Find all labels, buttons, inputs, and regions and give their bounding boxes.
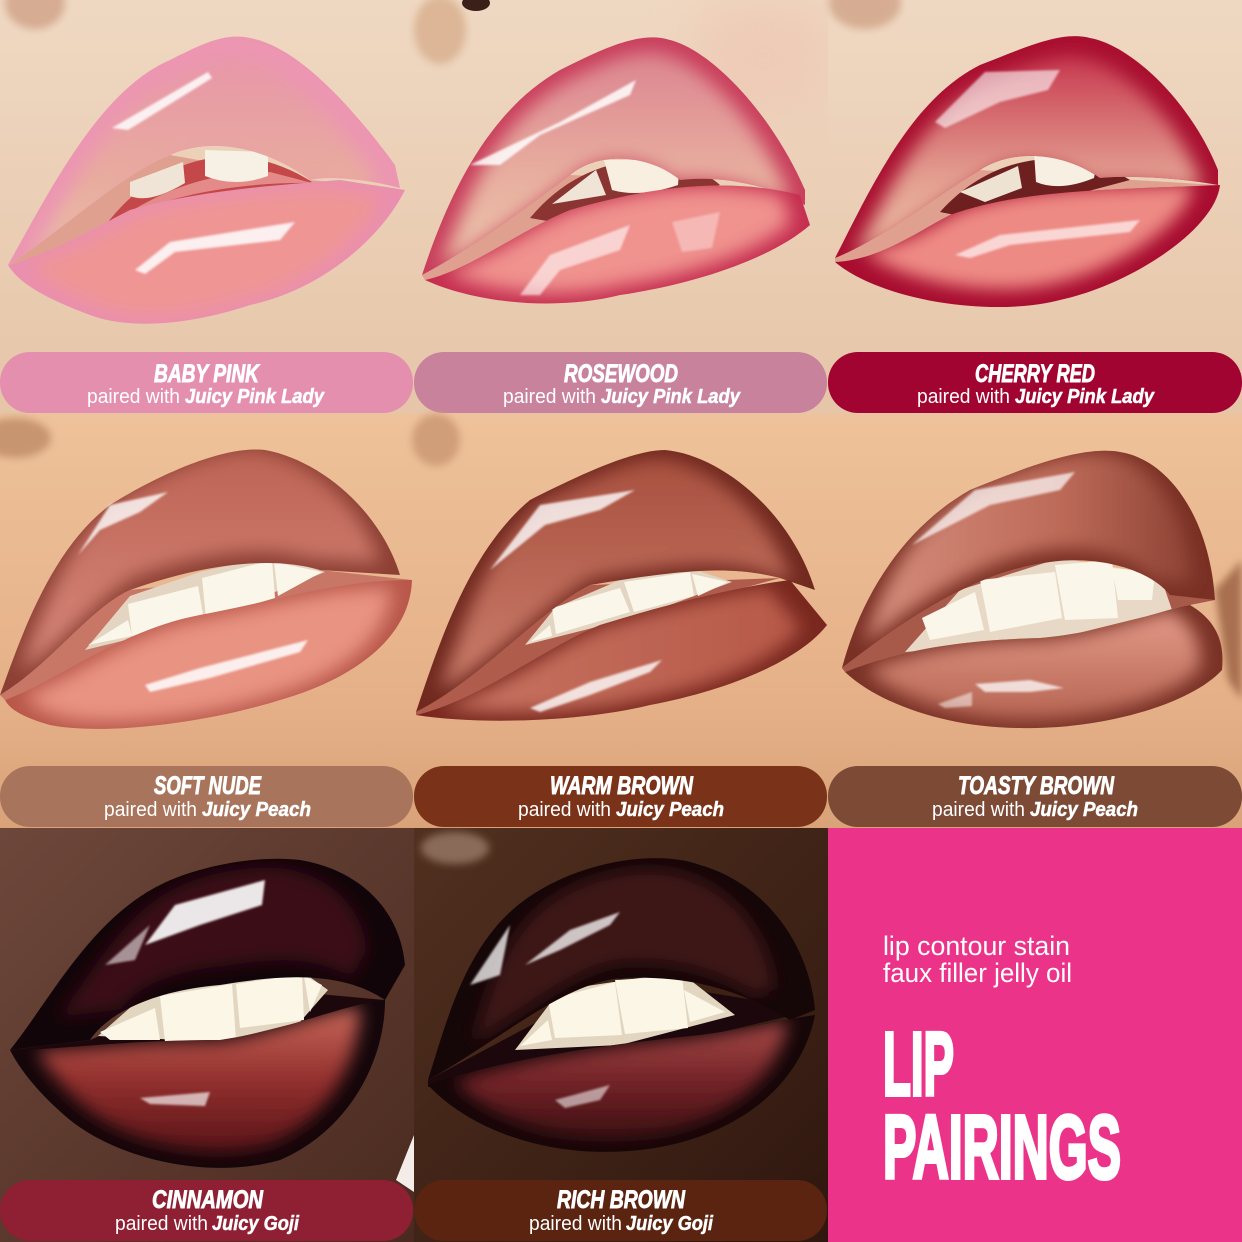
label: cinnamon: CINNAMON: [152, 1186, 264, 1214]
label: cinnamon: Juicy Goji: [212, 1213, 299, 1235]
title: LIP: [883, 1015, 954, 1115]
label: soft nude: SOFT NUDE: [154, 772, 262, 800]
label: baby pink: paired with: [87, 386, 180, 408]
label: baby pink: [0, 352, 413, 413]
label: cherry red: Juicy Pink Lady: [1015, 386, 1155, 408]
label: soft nude: paired with: [104, 799, 197, 821]
label: cherry red: CHERRY RED: [975, 360, 1095, 388]
label: cherry red: [828, 352, 1242, 413]
subtitle: [883, 931, 1072, 988]
label: cinnamon: [0, 1180, 413, 1241]
label: toasty brown: Juicy Peach: [1030, 799, 1138, 821]
label: rosewood: paired with: [503, 386, 596, 408]
panel: rosewood: [414, 0, 828, 414]
label: rich brown: RICH BROWN: [557, 1186, 686, 1214]
panel: lip pairings title: [828, 828, 1242, 1242]
label: cherry red: paired with: [917, 386, 1010, 408]
label: warm brown: Juicy Peach: [616, 799, 724, 821]
label: baby pink: Juicy Pink Lady: [185, 386, 325, 408]
label: soft nude: [0, 766, 413, 827]
lips: toasty brown: [842, 451, 1223, 728]
panel: toasty brown: [828, 414, 1242, 828]
label: toasty brown: [828, 766, 1242, 827]
lips: cinnamon: [10, 859, 405, 1168]
lips: cherry red: [835, 36, 1220, 307]
panel: baby pink: [0, 0, 414, 414]
label: warm brown: [414, 766, 827, 827]
panel: rich brown: [414, 828, 828, 1242]
lips: rosewood: [422, 37, 810, 303]
label: cinnamon: paired with: [115, 1213, 208, 1235]
label: warm brown: paired with: [518, 799, 611, 821]
label: rich brown: paired with: [529, 1213, 622, 1235]
subtitle: lip contour stain: [883, 931, 1070, 961]
label: soft nude: Juicy Peach: [202, 799, 311, 821]
lips: rich brown: [428, 858, 815, 1152]
lips: baby pink: [8, 37, 405, 324]
label: toasty brown: paired with: [932, 799, 1025, 821]
label: toasty brown: TOASTY BROWN: [958, 772, 1115, 800]
label: baby pink: BABY PINK: [154, 360, 260, 388]
panel: cherry red: [828, 0, 1242, 414]
label: rosewood: [414, 352, 827, 413]
lips: soft nude: [0, 450, 412, 729]
title: [883, 1015, 1121, 1198]
panel: cinnamon: [0, 828, 414, 1242]
panel: warm brown: [412, 414, 828, 828]
label: rosewood: Juicy Pink Lady: [601, 386, 741, 408]
label: warm brown: WARM BROWN: [550, 772, 694, 800]
subtitle: faux filler jelly oil: [883, 958, 1072, 988]
label: rich brown: Juicy Goji: [626, 1213, 713, 1235]
lips: warm brown: [416, 450, 827, 721]
label: rosewood: ROSEWOOD: [564, 360, 678, 388]
label: rich brown: [414, 1180, 827, 1241]
panel: soft nude: [0, 414, 414, 828]
